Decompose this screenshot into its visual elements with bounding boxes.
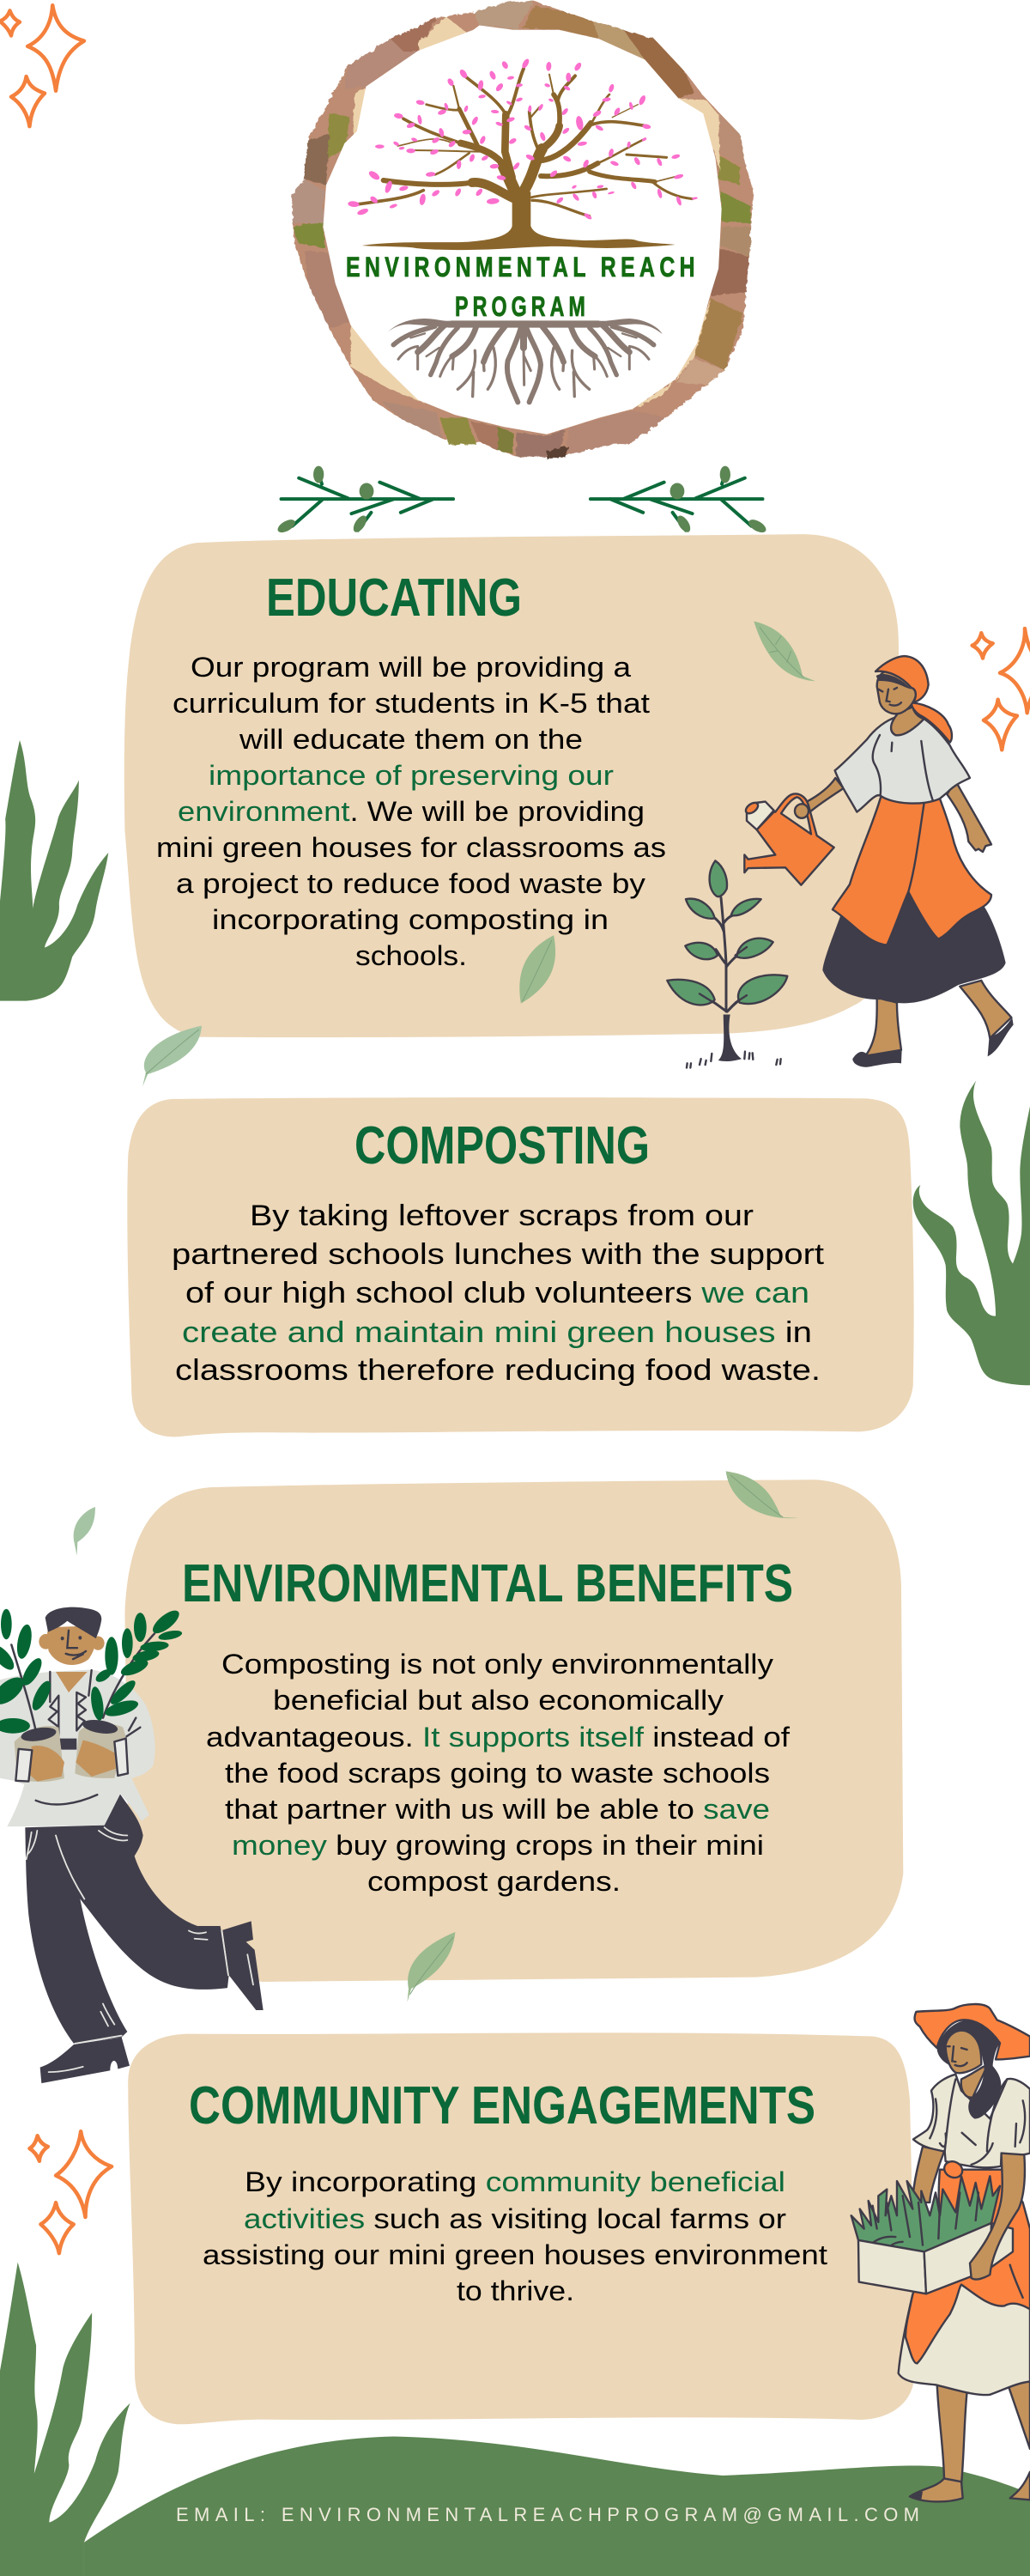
- text: educating body: environment . We will be providing: [178, 796, 645, 827]
- text: composting body: [172, 1200, 825, 1387]
- text: composting body: create and maintain mini green houses in: [182, 1316, 812, 1349]
- woman headscarf tail: [912, 702, 952, 743]
- logo wood ring: [293, 2, 754, 459]
- woman hand on handle: [795, 804, 809, 818]
- heading: composting: COMPOSTING: [354, 1116, 650, 1176]
- woman blouse: [835, 717, 970, 812]
- text: educating body: Our program will be providing a: [191, 652, 631, 683]
- man head: [39, 1607, 105, 1665]
- icon: leaf below educating: [142, 1026, 202, 1086]
- woman blouse: [913, 2075, 1030, 2167]
- man hands: [30, 1746, 64, 1782]
- decorative branch left: [274, 466, 453, 534]
- woman neck: [891, 707, 924, 735]
- logo white centre: [323, 26, 722, 434]
- watering can: [744, 793, 834, 885]
- logo text: PROGRAM: [455, 291, 590, 322]
- icon: orange sparkles right of educating: [972, 629, 1030, 750]
- panel: composting background: [127, 1097, 914, 1437]
- icon: leaf lower educating: [519, 935, 555, 1004]
- woman orange overskirt: [833, 796, 991, 945]
- icon: orange sparkles by community panel: [29, 2131, 112, 2253]
- plant box foliage: [851, 2176, 1000, 2263]
- text: environmental benefits body: compost gardens.: [367, 1866, 621, 1897]
- text: environmental benefits body: money buy growing crops in their mini: [232, 1830, 764, 1861]
- text: community engagements body: assisting our mini green houses environment: [203, 2239, 827, 2270]
- figure: woman carrying plant box: [851, 2004, 1030, 2501]
- text: educating body: curriculum for students in K-5 that: [173, 688, 650, 719]
- grass left of educating panel: [0, 740, 108, 1001]
- logo text: ENVIRONMENTAL REACH: [346, 252, 700, 283]
- panel: community engagements background: [128, 2032, 914, 2424]
- man shirt: [0, 1669, 155, 1826]
- text: educating body: schools.: [355, 940, 467, 971]
- woman hat: [915, 2004, 1030, 2059]
- woman headscarf: [876, 656, 929, 702]
- logo roots: [386, 319, 663, 402]
- figure: seedling plant: [667, 860, 787, 1067]
- woman legs and shoes: [852, 981, 1014, 1067]
- text: community engagements body: [203, 2166, 827, 2306]
- grass bottom left: [0, 2263, 130, 2576]
- man pots and soil: [15, 1717, 126, 1782]
- woman face: [946, 2031, 981, 2073]
- text: composting body: classrooms therefore reducing food waste.: [175, 1354, 821, 1387]
- tree ground and trunk: [362, 191, 676, 250]
- text: educating body: a project to reduce food waste by: [176, 868, 645, 899]
- footer email: EMAIL: ENVIRONMENTALREACHPROGRAM@GMAIL.COM: [176, 2504, 919, 2525]
- heading: community engagements: COMMUNITY ENGAGEMENTS: [189, 2076, 815, 2136]
- panel: environmental benefits background: [124, 1479, 903, 1982]
- figure: woman with watering can: [744, 656, 1014, 1067]
- text: community engagements body: to thrive.: [457, 2275, 574, 2306]
- logo text: [346, 252, 700, 322]
- icon: leaf top right benefits: [726, 1471, 798, 1518]
- woman hair back: [937, 2020, 1001, 2119]
- woman arms: [947, 781, 991, 852]
- man cuffs: [15, 1749, 32, 1782]
- plant box: [858, 2223, 1013, 2293]
- figure: man carrying plants: [0, 1607, 264, 2083]
- woman arm and hand over box: [970, 2154, 1025, 2280]
- text: educating body: importance of preserving our: [209, 760, 614, 791]
- logo tree: [348, 58, 698, 250]
- right root branches: [542, 325, 654, 397]
- heading: educating: EDUCATING: [266, 568, 522, 628]
- decorative branch right: [591, 466, 770, 534]
- text: community engagements body: activities such as visiting local farms or: [244, 2203, 786, 2234]
- logo: environmental reach program: [293, 2, 754, 459]
- heading: environmental benefits: ENVIRONMENTAL BENEFITS: [182, 1554, 793, 1613]
- text: environmental benefits body: the food scraps going to waste schools: [225, 1758, 770, 1789]
- text: educating body: mini green houses for classrooms as: [156, 832, 666, 863]
- text: environmental benefits body: advantageous. It supports itself instead of: [206, 1722, 790, 1753]
- text: environmental benefits body: that partner with us will be able to save: [225, 1794, 770, 1825]
- man trousers and shoes: [25, 1794, 264, 2083]
- icon: orange sparkles top left: [0, 5, 84, 126]
- woman arm behind box: [912, 2147, 944, 2202]
- text: educating body: will educate them on the: [239, 724, 583, 755]
- tree pink leaves: [348, 58, 698, 221]
- woman head and face: [877, 670, 917, 714]
- woman orange overskirt: [906, 2170, 1030, 2363]
- grass right of composting panel: [913, 1080, 1030, 1385]
- icon: leaf floating left of benefits: [74, 1507, 95, 1556]
- text: community engagements body: By incorporating community beneficial: [245, 2166, 785, 2197]
- text: composting body: partnered schools lunches with the support: [172, 1238, 825, 1271]
- left root branches: [393, 325, 505, 397]
- icon: leaf upper educating: [754, 621, 815, 681]
- man plants: [0, 1607, 183, 1734]
- text: environmental benefits body: beneficial but also economically: [273, 1685, 724, 1716]
- text: environmental benefits body: [206, 1649, 790, 1897]
- text: educating body: incorporating composting in: [212, 904, 609, 935]
- woman sash knot: [942, 2160, 964, 2180]
- tree branches: [354, 69, 693, 216]
- text: composting body: By taking leftover scraps from our: [250, 1200, 754, 1232]
- text: composting body: of our high school club volunteers we can: [185, 1277, 809, 1309]
- logo pale inner patches: [351, 16, 720, 410]
- text: environmental benefits body: Composting is not only environmentally: [221, 1649, 773, 1680]
- woman neck: [961, 2066, 987, 2098]
- woman legs and feet: [910, 2380, 1030, 2501]
- woman dark skirt: [822, 884, 1006, 1003]
- woman cream skirt: [899, 2281, 1030, 2395]
- icon: leaf bottom benefits: [407, 1932, 455, 2002]
- panel: educating background: [124, 534, 899, 1037]
- green hill footer: [84, 2437, 1030, 2576]
- text: educating body: [156, 652, 666, 971]
